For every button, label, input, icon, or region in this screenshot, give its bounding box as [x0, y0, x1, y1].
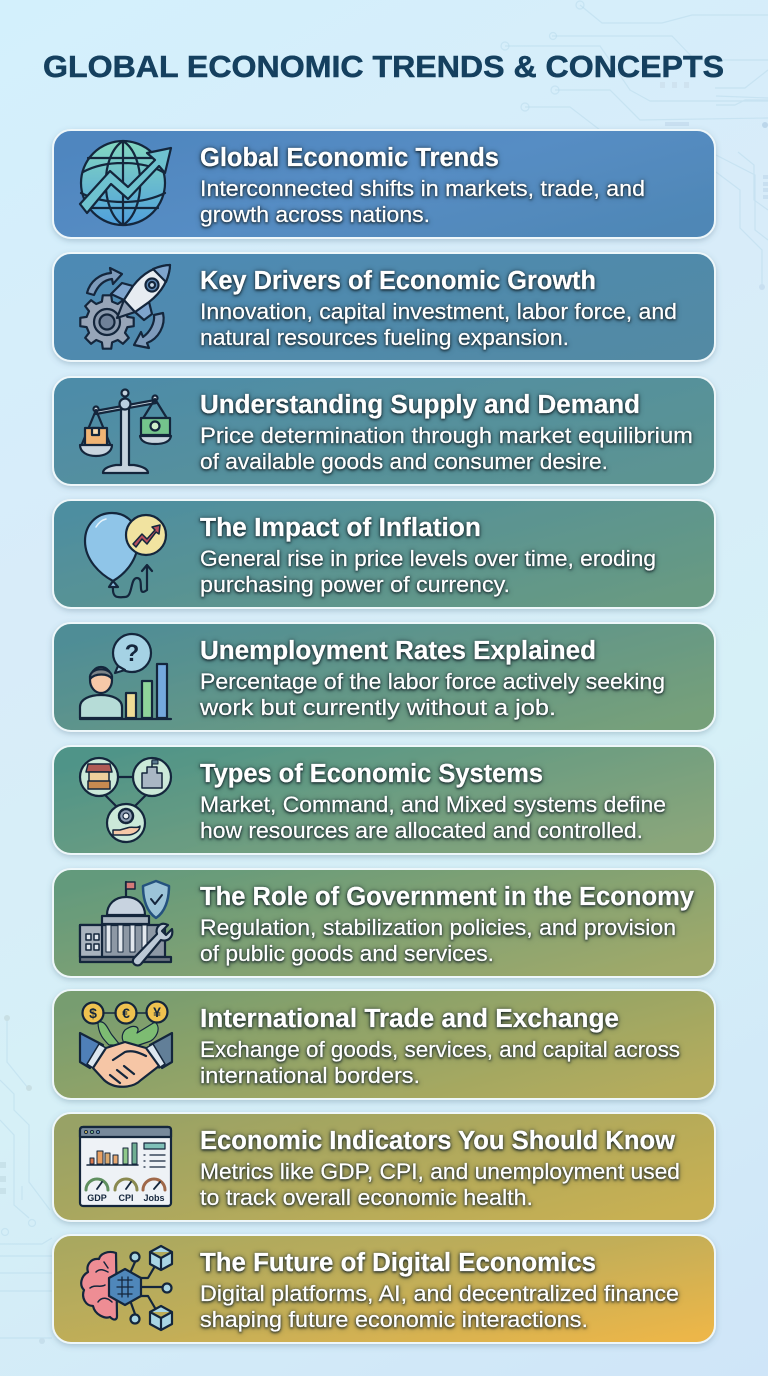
- heading: Economic Indicators You Should Know: [200, 1127, 675, 1155]
- icon: three connected system circles: [80, 758, 171, 842]
- icon: brain, network hexagon and cubes: [81, 1246, 172, 1330]
- heading: The Role of Government in the Economy: [200, 883, 695, 911]
- panel: The Impact of Inflation: [53, 500, 715, 608]
- description: [200, 176, 645, 227]
- icon: gear and rocket: [80, 265, 170, 349]
- icon: dashboard window: [80, 1127, 171, 1206]
- description: [200, 1159, 680, 1210]
- description: Percentage of the labor force actively seeking: [200, 669, 665, 694]
- panel: Global Economic Trends: [53, 130, 715, 238]
- description: work but currently without a job.: [199, 695, 556, 720]
- icon: handshake with currency coins: [80, 1002, 172, 1087]
- description: Market, Command, and Mixed systems define: [200, 792, 666, 817]
- icon: balloon with chart badge: [85, 513, 166, 597]
- icon: globe with rising arrow: [80, 141, 171, 225]
- description: Exchange of goods, services, and capital across: [200, 1037, 680, 1062]
- description: Interconnected shifts in markets, trade, and: [200, 176, 645, 201]
- icon: government building, shield and wrench: [80, 881, 172, 965]
- panel: Key Drivers of Economic Growth: [53, 253, 715, 361]
- description: [200, 299, 677, 350]
- description: purchasing power of currency.: [200, 572, 510, 597]
- icon glyphs: currency symbols: ¥: [153, 1004, 161, 1020]
- heading: Understanding Supply and Demand: [200, 391, 640, 419]
- description: [200, 1281, 679, 1332]
- description: General rise in price levels over time, eroding: [200, 546, 656, 571]
- heading: Global Economic Trends: [200, 144, 499, 172]
- description: growth across nations.: [200, 202, 430, 227]
- description: [200, 546, 656, 597]
- heading: Types of Economic Systems: [200, 760, 543, 788]
- description: how resources are allocated and controlled.: [200, 818, 643, 843]
- description: Digital platforms, AI, and decentralized finance: [200, 1281, 679, 1306]
- heading: International Trade and Exchange: [200, 1005, 619, 1033]
- title: GLOBAL ECONOMIC TRENDS & CONCEPTS: [43, 49, 724, 84]
- description: [200, 915, 676, 966]
- heading: The Impact of Inflation: [200, 514, 481, 542]
- description: [200, 423, 693, 474]
- heading: The Future of Digital Economics: [200, 1249, 596, 1277]
- icon glyphs: currency symbols: $: [89, 1005, 97, 1021]
- description: Metrics like GDP, CPI, and unemployment used: [200, 1159, 680, 1184]
- panel: The Role of Government in the Economy: [53, 869, 715, 977]
- icon glyph: question mark: ?: [125, 640, 139, 667]
- icon labels: GDP, CPI, Jobs: Jobs: [143, 1193, 165, 1203]
- panel: Economic Indicators You Should Know: [53, 1113, 715, 1221]
- icon labels: GDP, CPI, Jobs: CPI: [118, 1193, 134, 1203]
- description: natural resources fueling expansion.: [200, 325, 569, 350]
- description: to track overall economic health.: [200, 1185, 533, 1210]
- icon labels: GDP, CPI, Jobs: GDP: [87, 1193, 107, 1203]
- description: Price determination through market equilibrium: [200, 423, 693, 448]
- description: Regulation, stabilization policies, and provision: [200, 915, 676, 940]
- panel: Understanding Supply and Demand: [53, 377, 715, 485]
- panel: Types of Economic Systems: [53, 746, 715, 854]
- icon glyphs: currency symbols: [89, 1004, 161, 1021]
- panel: The Future of Digital Economics: [53, 1235, 715, 1343]
- icon: person, question bubble and bars: [80, 634, 171, 719]
- icon: balance scale: [80, 390, 171, 473]
- description: [200, 1037, 680, 1088]
- description: [200, 792, 666, 843]
- heading: Key Drivers of Economic Growth: [200, 267, 596, 295]
- icon labels: GDP, CPI, Jobs: [87, 1193, 165, 1203]
- description: international borders.: [200, 1063, 420, 1088]
- panel: Unemployment Rates Explained: [53, 623, 715, 731]
- description: of available goods and consumer desire.: [200, 449, 608, 474]
- description: [199, 669, 665, 720]
- description: Innovation, capital investment, labor force, and: [200, 299, 677, 324]
- icon glyphs: currency symbols: €: [122, 1005, 130, 1021]
- heading: Unemployment Rates Explained: [200, 637, 596, 665]
- description: shaping future economic interactions.: [200, 1307, 588, 1332]
- panel: International Trade and Exchange: [53, 990, 715, 1099]
- description: of public goods and services.: [200, 941, 494, 966]
